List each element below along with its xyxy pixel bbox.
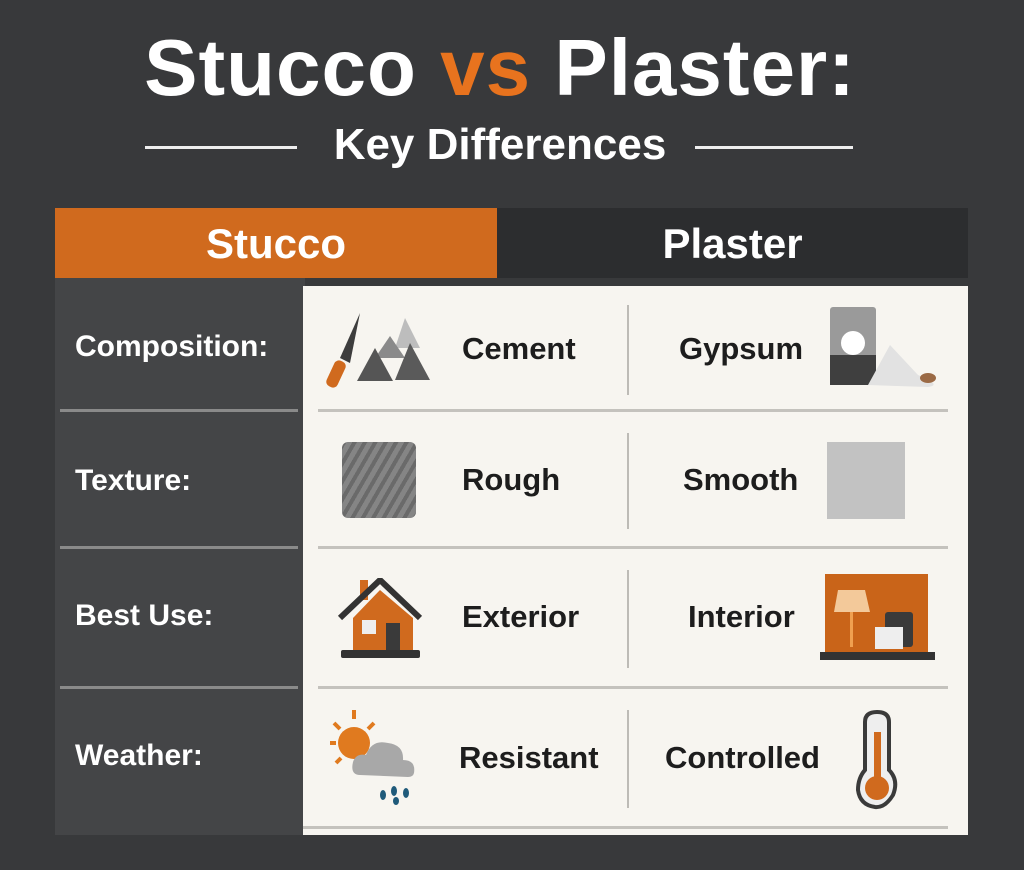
header: plaster: Plaster: [662, 220, 803, 267]
icon: smooth texture: [827, 442, 905, 519]
icon: gypsum bag: [830, 307, 936, 387]
label: composition: Composition:: [75, 330, 268, 363]
icon: house: [338, 578, 422, 658]
label: best use: Best Use:: [75, 599, 213, 632]
text: cement: Cement: [462, 331, 576, 366]
left label column: [55, 278, 305, 835]
content panel: [303, 286, 968, 835]
text: gypsum: Gypsum: [679, 331, 803, 366]
label: texture: Texture:: [75, 464, 191, 497]
subtitle: [145, 120, 853, 169]
header: stucco: [55, 208, 497, 278]
icon: trowel and cement: [326, 313, 430, 388]
icon: thermometer: [856, 710, 898, 810]
label: weather: Weather:: [75, 739, 203, 772]
icon: rough texture: [342, 442, 416, 518]
subtitle: Key Differences: [334, 120, 666, 169]
icon: weather: [330, 710, 414, 805]
text: exterior: Exterior: [462, 599, 579, 634]
text: controlled: Controlled: [665, 740, 820, 775]
text: interior: Interior: [688, 599, 795, 634]
text: rough: Rough: [462, 462, 560, 497]
title: Stucco vs Plaster:: [144, 23, 856, 112]
icon: interior room: [820, 574, 935, 660]
header: stucco: Stucco: [206, 220, 346, 267]
header: plaster: [497, 208, 968, 278]
text: smooth: Smooth: [683, 462, 798, 497]
text: resistant: Resistant: [459, 740, 599, 775]
